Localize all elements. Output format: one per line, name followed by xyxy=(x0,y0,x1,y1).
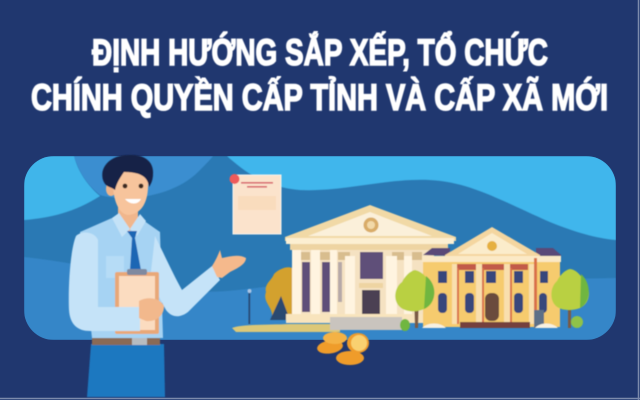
icon: tree right xyxy=(551,269,589,328)
belt xyxy=(92,337,160,345)
torso xyxy=(80,218,163,338)
shirt pocket xyxy=(106,256,124,278)
icon: decree document xyxy=(230,174,281,234)
title xyxy=(31,30,608,118)
hand on clipboard xyxy=(139,298,164,321)
icon: small yellow building xyxy=(422,227,561,328)
neck xyxy=(118,205,138,232)
icon: tree centre xyxy=(395,270,434,331)
shrubs at base xyxy=(422,324,558,328)
tie xyxy=(127,231,141,270)
right arm sleeve xyxy=(150,236,220,316)
icon: large columned building xyxy=(285,205,456,330)
hand open xyxy=(212,250,246,278)
windows xyxy=(438,271,548,313)
panel: illustration background xyxy=(24,156,616,340)
trousers xyxy=(87,344,165,397)
left arm sleeve xyxy=(69,233,140,331)
column capitals xyxy=(298,252,422,260)
red arches xyxy=(456,264,528,270)
clipboard xyxy=(115,269,159,334)
columns xyxy=(292,250,412,314)
icon: street lamp xyxy=(248,289,252,324)
head xyxy=(102,155,153,215)
illustration scene xyxy=(69,155,589,397)
figure: man with clipboard xyxy=(69,155,246,397)
collar xyxy=(112,213,146,237)
ground strip xyxy=(232,324,340,332)
icon: left trees xyxy=(265,267,292,320)
icon: gold coins xyxy=(316,332,369,365)
columns xyxy=(452,264,534,324)
